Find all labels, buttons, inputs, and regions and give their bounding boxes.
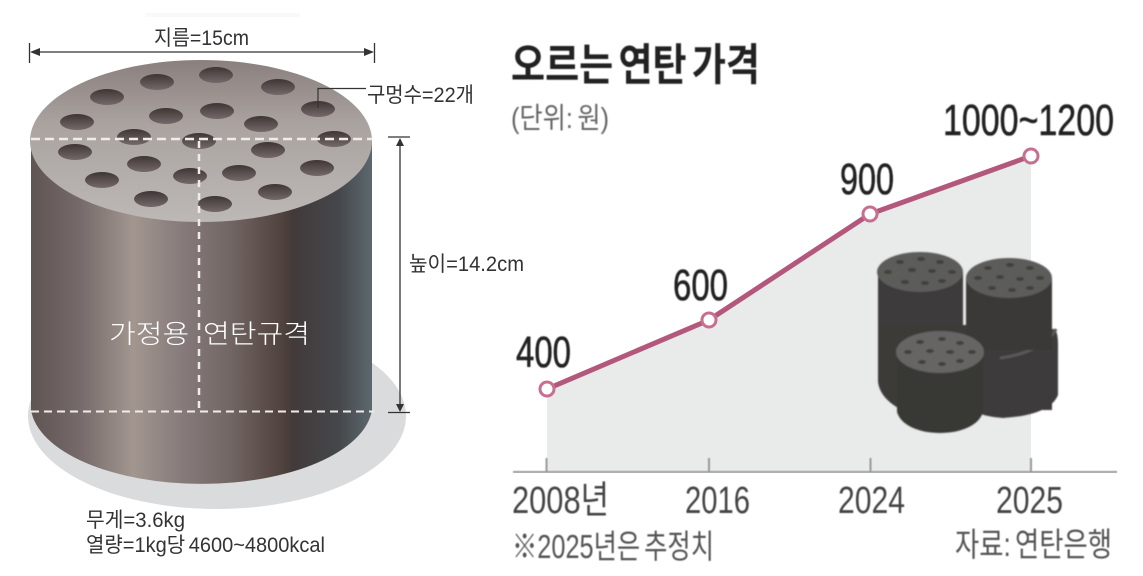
value: 2024: 900 — [840, 155, 894, 204]
chart area fill — [547, 156, 1031, 471]
data labels — [516, 96, 1114, 377]
value: 2008: 400 — [516, 328, 571, 377]
label: hole count: 구멍수=22개 — [367, 84, 474, 107]
height dimension arrow — [388, 137, 410, 412]
value: 2016: 600 — [673, 261, 728, 310]
x axis labels — [512, 480, 1063, 522]
heading: rising briquette price: 오르는 연탄 가격 — [511, 41, 760, 90]
panel: briquette specification — [28, 13, 524, 557]
data markers — [540, 149, 1038, 396]
dashed guide lines — [31, 139, 374, 412]
icon: briquette cylinder — [28, 60, 406, 509]
price line — [547, 156, 1031, 389]
year: 2025: 2025 — [996, 480, 1063, 522]
label: diameter: 지름=15cm — [154, 27, 249, 50]
hole count callout line — [318, 88, 366, 108]
text: weight: 무게=3.6kg — [86, 509, 185, 532]
diameter dimension arrow — [30, 43, 374, 63]
panel: rising briquette price — [511, 41, 1117, 565]
text: calorific value: 열량=1kg당 4600~4800kcal — [86, 534, 325, 557]
line chart — [513, 149, 1117, 472]
year: 2008: 2008년 — [512, 480, 609, 522]
heading: household briquette spec: 가정용 연탄규격 — [109, 319, 310, 349]
footnote: 2025 estimate: ※2025년은 추정치 — [512, 528, 714, 565]
year: 2016: 2016 — [685, 480, 750, 522]
faint header remnant — [145, 13, 300, 17]
year: 2024: 2024 — [838, 480, 905, 522]
label: height: 높이=14.2cm — [409, 253, 524, 276]
icon: stacked briquettes — [877, 252, 1058, 433]
x axis — [513, 458, 1117, 472]
text: unit: (단위: 원) — [511, 102, 609, 135]
